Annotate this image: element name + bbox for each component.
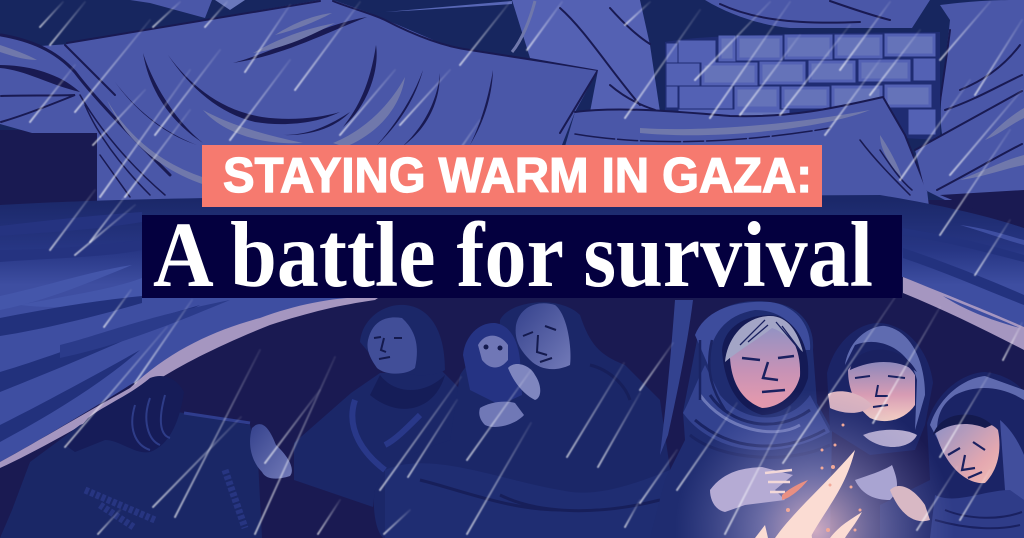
- effect: fire glow: [675, 390, 955, 538]
- icon: hands warming over fire: [710, 465, 930, 521]
- icon: fire flames and sparks: [755, 424, 862, 538]
- mother lower hand: [479, 402, 524, 427]
- child hands at mouth: [828, 391, 872, 413]
- baby face: [478, 336, 508, 368]
- baby in wrap: [463, 323, 522, 405]
- child face: [848, 356, 915, 421]
- figure: elderly woman by the fire: [650, 301, 832, 538]
- panel: tarp over wall: [545, 90, 1024, 215]
- post on the left of the elder: [660, 300, 693, 455]
- icon: clenched fist: [250, 424, 292, 479]
- figure: child on the right: [880, 372, 1024, 538]
- mother face: [516, 303, 570, 369]
- face: [935, 421, 999, 483]
- panel: foreground tarp band: [0, 190, 1024, 468]
- figure: child in hood: [827, 323, 933, 455]
- figure: mother holding a baby: [374, 302, 680, 538]
- figure: woman with shawl: [294, 305, 470, 507]
- elder face: [722, 315, 808, 415]
- woman face: [367, 317, 417, 374]
- child collar glow: [863, 430, 917, 447]
- title banner: staying warm in Gaza: STAYING WARM IN GAZA:: [223, 149, 812, 203]
- mother hand on baby: [508, 364, 540, 400]
- panel: brick wall: [665, 32, 940, 140]
- title banner: a battle for survival: A battle for survival: [153, 204, 873, 307]
- panel: rubble and fabric behind wall: [512, 0, 1024, 145]
- panel: upper left tent tarp: [0, 0, 598, 215]
- figure: person lying on the left: [0, 376, 292, 538]
